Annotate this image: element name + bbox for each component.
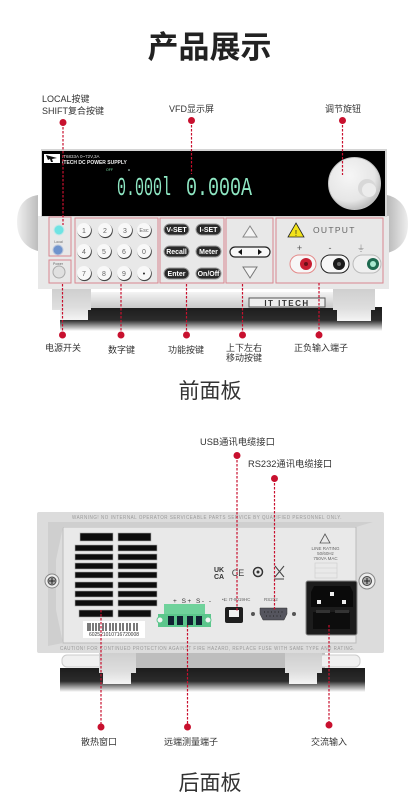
numeric keypad: 8 <box>102 271 106 278</box>
callout: RS232 cable: RS232通讯电缆接口 <box>248 458 332 469</box>
USB port <box>222 597 255 623</box>
model text: ITECH DC POWER SUPPLY <box>62 160 127 166</box>
callout: knob: 调节旋钮 <box>325 103 361 114</box>
RS232 port: RS232 <box>264 597 278 602</box>
cert marks: UK <box>214 567 224 574</box>
callout: numeric keys <box>108 284 135 355</box>
numeric keypad: 4 <box>82 249 86 256</box>
callout: function keys: 功能按键 <box>168 344 204 355</box>
green terminal <box>353 255 381 273</box>
output section <box>276 218 383 283</box>
status OFF: OFF <box>106 168 113 172</box>
right screw <box>359 573 375 589</box>
left foot <box>52 289 91 320</box>
numeric keypad: 1 <box>82 228 86 235</box>
model text: IT6833A 0~72V,3A <box>62 154 100 159</box>
output section: OUTPUT <box>313 225 356 235</box>
cert marks <box>214 566 284 581</box>
callout: vent window: 散热窗口 <box>81 736 117 747</box>
numeric keypad: 7 <box>82 271 86 278</box>
callout: LOCAL key <box>42 93 104 225</box>
status OFF <box>106 168 130 172</box>
line rating <box>312 534 340 578</box>
callout: AC input <box>311 625 347 747</box>
inner recess <box>63 527 356 643</box>
cert marks: CE <box>232 568 244 578</box>
output section: ⏚ <box>357 244 365 253</box>
arrow keys <box>226 218 273 283</box>
callout: VFD display <box>169 104 214 174</box>
heading: front panel: 前面板 <box>178 380 242 403</box>
callout: LOCAL key: SHIFT复合按键 <box>42 105 104 116</box>
callout: output terminals: 正负输入端子 <box>294 342 348 353</box>
left handle <box>17 195 38 251</box>
title: 产品展示 <box>148 30 272 65</box>
red terminal <box>290 255 316 273</box>
vent slots <box>75 533 157 617</box>
callout: knob <box>325 103 361 175</box>
callout: output terminals <box>294 283 348 353</box>
chassis <box>38 216 389 289</box>
numeric keypad: 0 <box>142 249 146 256</box>
rear underside <box>100 653 325 668</box>
model text <box>62 154 127 166</box>
numeric keypad: 5 <box>102 249 106 256</box>
function keys: V-SET <box>166 227 187 234</box>
ITECH badge <box>249 298 325 308</box>
output section: - <box>328 243 332 253</box>
ITECH badge: IT ITECH <box>264 299 310 308</box>
numeric keypad: 9 <box>122 271 126 278</box>
LOCAL box <box>49 217 71 256</box>
callout: remote sense terminal: 远端测量端子 <box>164 736 218 747</box>
function keys: Recall <box>166 249 187 256</box>
numeric keypad: 3 <box>123 228 127 235</box>
callout: remote sense terminal <box>164 625 218 747</box>
rear panel device <box>37 512 384 692</box>
output section: + <box>297 243 302 253</box>
readout current: 0.000A <box>186 173 252 203</box>
callout: AC input: 交流输入 <box>311 736 347 747</box>
AC socket <box>306 581 357 635</box>
power box: Power <box>53 262 64 266</box>
rear left foot <box>99 653 136 684</box>
power box <box>49 260 71 283</box>
black terminal <box>321 255 349 273</box>
numeric keypad: 2 <box>103 228 107 235</box>
callout: arrow keys: 上下左右 <box>226 342 262 353</box>
numeric keypad: • <box>143 271 146 278</box>
logo <box>44 154 60 163</box>
callout: power switch: 电源开关 <box>45 342 81 353</box>
callout: LOCAL key: LOCAL按键 <box>42 93 90 104</box>
function keys: I-SET <box>200 227 218 234</box>
function keys: Meter <box>199 249 218 256</box>
front shadow under device <box>60 307 382 331</box>
callout: USB cable <box>200 436 275 612</box>
display bezel <box>41 149 387 217</box>
RS232 port <box>260 597 296 620</box>
readout voltage: 0.000l <box>117 173 171 203</box>
callout: vent window <box>81 610 117 747</box>
green sense connector <box>157 598 213 627</box>
numeric keypad: 6 <box>122 249 126 256</box>
callout: power switch <box>45 284 81 353</box>
callout: arrow keys: 移动按键 <box>226 352 262 363</box>
barcode: 602521010716720008 <box>89 632 139 638</box>
left screw <box>45 574 59 588</box>
rear shadow <box>60 668 365 692</box>
rear right foot <box>285 653 322 684</box>
USB port: •⇇ IT-9019HC <box>222 597 251 602</box>
right handle <box>387 195 408 253</box>
heading: rear panel: 后面板 <box>178 772 242 795</box>
function keys <box>160 218 224 283</box>
cert marks: CA <box>214 574 224 581</box>
callout: VFD display: VFD显示屏 <box>169 104 214 114</box>
function keys: Enter <box>168 271 186 278</box>
barcode <box>83 621 145 638</box>
warning triangle: ! <box>295 229 297 238</box>
callout: arrow keys <box>226 284 262 363</box>
line rating: LINE RATING <box>312 546 340 551</box>
callout: function keys <box>168 284 204 355</box>
green sense connector: + S+ S- - <box>173 598 213 605</box>
callout: USB cable: USB通讯电缆接口 <box>200 436 275 447</box>
numeric keypad: Esc <box>139 228 149 234</box>
line rating: 50/60Hz <box>317 551 335 556</box>
VFD display <box>42 151 385 216</box>
caution strip: CAUTION! FOR CONTINUED PROTECTION AGAINST FIRE HAZARD, REPLACE FUSE WITH SAME TYPE AND RATING. <box>60 646 355 652</box>
callout: numeric keys: 数字键 <box>108 344 135 355</box>
rear handle bars <box>62 655 104 667</box>
callout: RS232 cable <box>248 458 332 610</box>
LOCAL box: Local <box>54 240 63 244</box>
line rating: 750VA MAC <box>313 556 338 561</box>
knob <box>328 158 380 210</box>
front panel device <box>17 149 408 331</box>
function keys: On/Off <box>198 271 220 278</box>
right foot <box>333 289 375 321</box>
device underside <box>90 292 340 308</box>
outer frame <box>37 512 384 653</box>
warning strip: WARNING! NO INTERNAL OPERATOR SERVICEABLE PARTS SERVICE BY QUALIFIED PERSONNEL ONLY. <box>72 515 342 521</box>
numeric keypad <box>75 218 158 283</box>
